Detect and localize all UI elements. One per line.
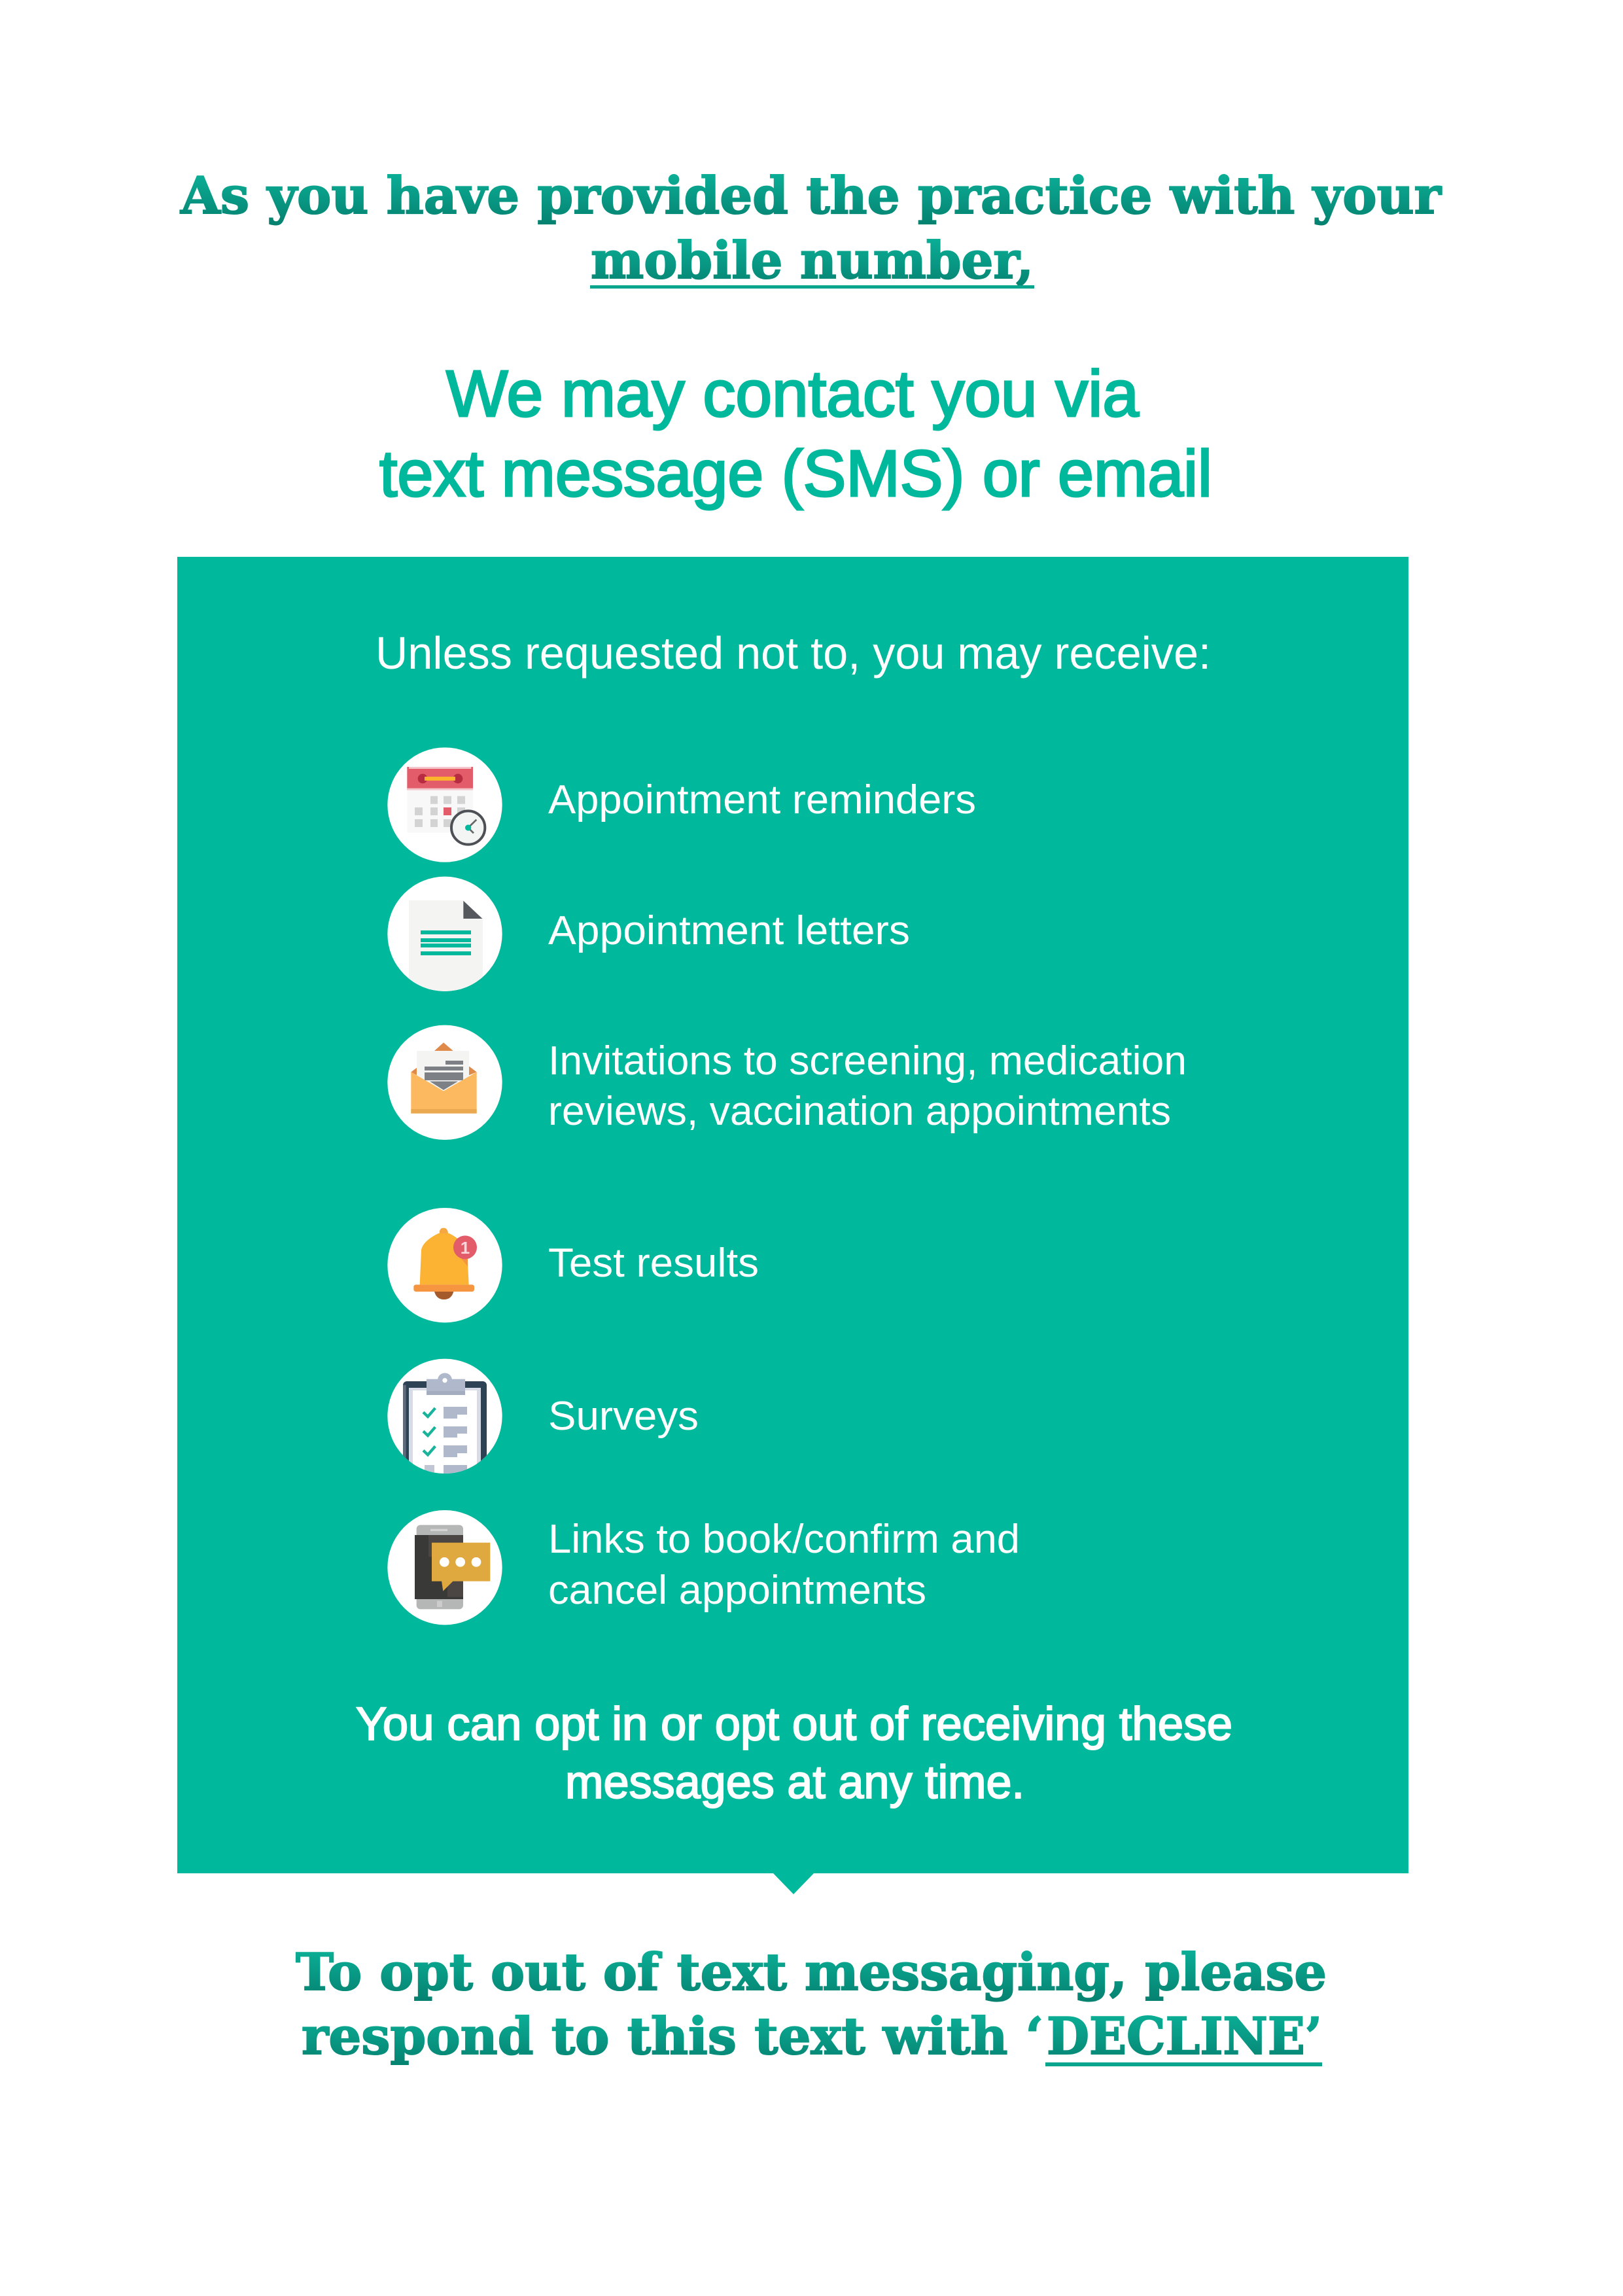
icon: notification bell: 1 xyxy=(461,1238,470,1258)
heading: contact via SMS or email: text message (SMS) or email xyxy=(379,437,1212,510)
label: surveys: Surveys xyxy=(548,1394,699,1439)
label: links to book or cancel: Links to book/confirm and xyxy=(548,1517,1020,1562)
call to action: opt out instruction: To opt out of text messaging, please xyxy=(296,1943,1327,2002)
icon: document letter xyxy=(387,877,502,993)
label: links to book or cancel: cancel appointments xyxy=(548,1568,926,1613)
label: appointment letters: Appointment letters xyxy=(548,908,910,953)
infographic page xyxy=(177,174,1442,2066)
panel intro text: Unless requested not to, you may receive: xyxy=(375,627,1211,679)
title: mobile number statement: mobile number, xyxy=(591,231,1034,291)
icon: open envelope xyxy=(387,1025,502,1140)
call to action: opt out instruction: respond to this text with ‘ xyxy=(302,2007,1043,2066)
icon: calendar with clock xyxy=(387,747,502,862)
heading: contact via SMS or email: We may contact you via xyxy=(446,357,1139,431)
title: mobile number statement: As you have provided the practice with your xyxy=(180,166,1442,226)
title: mobile number statement xyxy=(180,166,1442,291)
label: invitations: reviews, vaccination appointments xyxy=(548,1089,1171,1134)
label: links to book or cancel xyxy=(548,1517,1020,1613)
label: invitations xyxy=(548,1038,1187,1134)
icon: notification bell xyxy=(387,1208,502,1322)
icon: survey clipboard xyxy=(387,1359,502,1477)
panel: message types xyxy=(177,557,1408,1894)
label: appointment reminders: Appointment reminders xyxy=(548,777,976,822)
icon: phone with chat bubble xyxy=(387,1510,502,1625)
label: test results: Test results xyxy=(548,1241,759,1286)
opt in/out statement: messages at any time. xyxy=(565,1757,1024,1809)
call to action: opt out instruction xyxy=(296,1943,1327,2066)
opt in/out statement: You can opt in or opt out of receiving these xyxy=(356,1699,1232,1750)
opt in/out statement xyxy=(356,1699,1232,1809)
heading: contact via SMS or email xyxy=(379,357,1212,510)
call to action: opt out instruction: DECLINE’ xyxy=(1047,2007,1322,2066)
label: invitations: Invitations to screening, medication xyxy=(548,1038,1187,1084)
